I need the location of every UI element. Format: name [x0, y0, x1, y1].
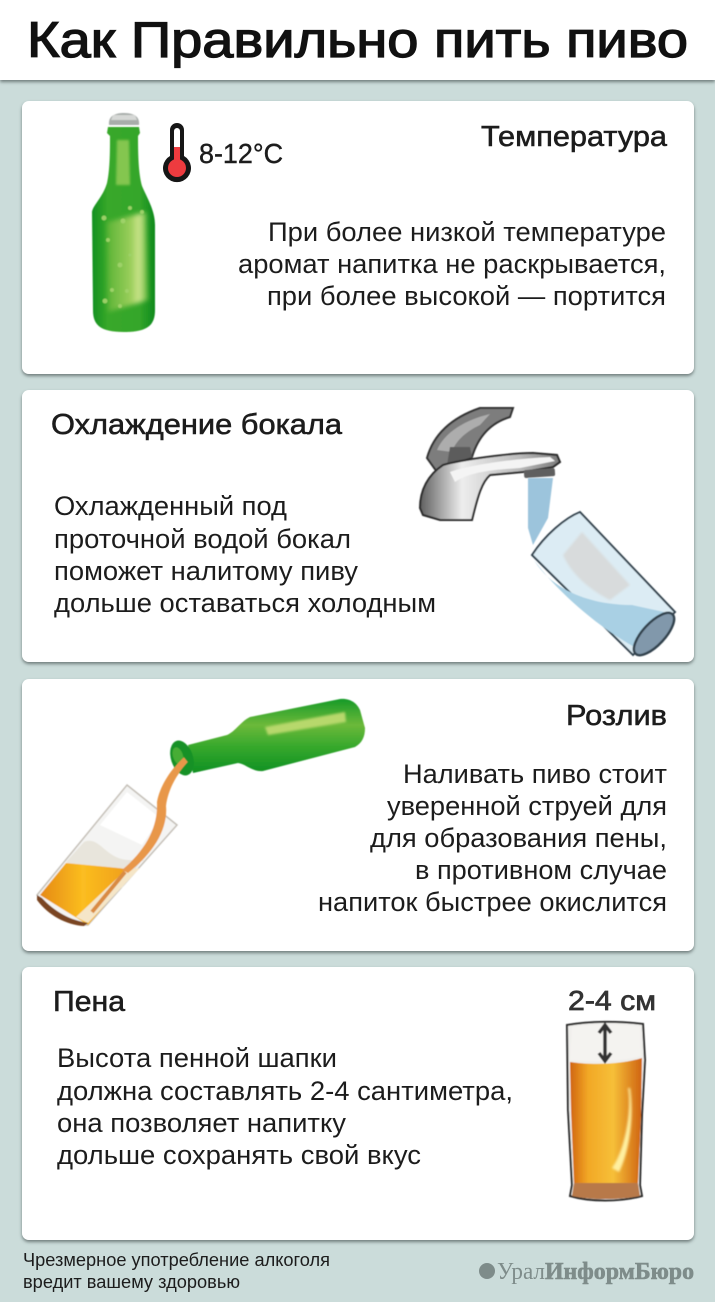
text block: Высота пенной шапки [57, 1043, 337, 1073]
icon: faucet [420, 408, 560, 520]
icon: green bottle [92, 113, 155, 332]
text block: при более высокой — портится [267, 281, 666, 311]
icon: pint glass [567, 1022, 645, 1200]
text block [57, 1043, 513, 1170]
footer disclaimer [23, 1250, 330, 1292]
icon: beer glass [37, 757, 188, 926]
text block: аромат напитка не раскрывается, [238, 249, 666, 279]
text block: Наливать пиво стоит [403, 759, 667, 789]
panel: temperature [22, 101, 694, 374]
header [0, 0, 715, 80]
icon: water stream [528, 478, 553, 545]
heading: Пена [53, 986, 125, 1018]
logo: Урал [497, 1259, 545, 1285]
text block [54, 491, 436, 618]
text block: должна составлять 2-4 сантиметра, [57, 1076, 513, 1106]
heading: Розлив [566, 700, 667, 732]
footer disclaimer: Чрезмерное употребление алкоголя [23, 1250, 330, 1270]
beer stream [122, 757, 188, 873]
text block [238, 217, 666, 311]
icon: thermometer [163, 123, 191, 182]
icon: glass under water [532, 512, 680, 661]
panel: foam [22, 967, 694, 1240]
logo [479, 1259, 694, 1285]
title: Как Правильно пить пиво [27, 12, 688, 68]
icon: double arrow [599, 1025, 611, 1061]
text block: для образования пены, [370, 823, 667, 853]
text block: Охлажденный под [54, 491, 288, 521]
logo: ИнформБюро [545, 1259, 694, 1285]
panel: pouring [22, 679, 694, 951]
temperature value: 8-12°C [199, 138, 283, 169]
text block: уверенной струей для [387, 791, 667, 821]
heading: Температура [481, 121, 667, 153]
text block: поможет налитому пиву [54, 556, 359, 586]
footer disclaimer: вредит вашему здоровью [23, 1272, 240, 1292]
text block [318, 759, 667, 917]
panel: glass chilling [22, 390, 694, 662]
text block: дольше сохранять свой вкус [57, 1140, 421, 1170]
icon: poured bottle [166, 699, 365, 779]
text block: она позволяет напитку [57, 1108, 347, 1138]
text block: проточной водой бокал [54, 524, 351, 554]
heading: Охлаждение бокала [51, 409, 342, 441]
text block: напиток быстрее окислится [318, 887, 667, 917]
foam height label: 2-4 см [568, 985, 656, 1016]
text block: При более низкой температуре [268, 217, 666, 247]
text block: в противном случае [415, 855, 667, 885]
text block: дольше оставаться холодным [54, 588, 436, 618]
